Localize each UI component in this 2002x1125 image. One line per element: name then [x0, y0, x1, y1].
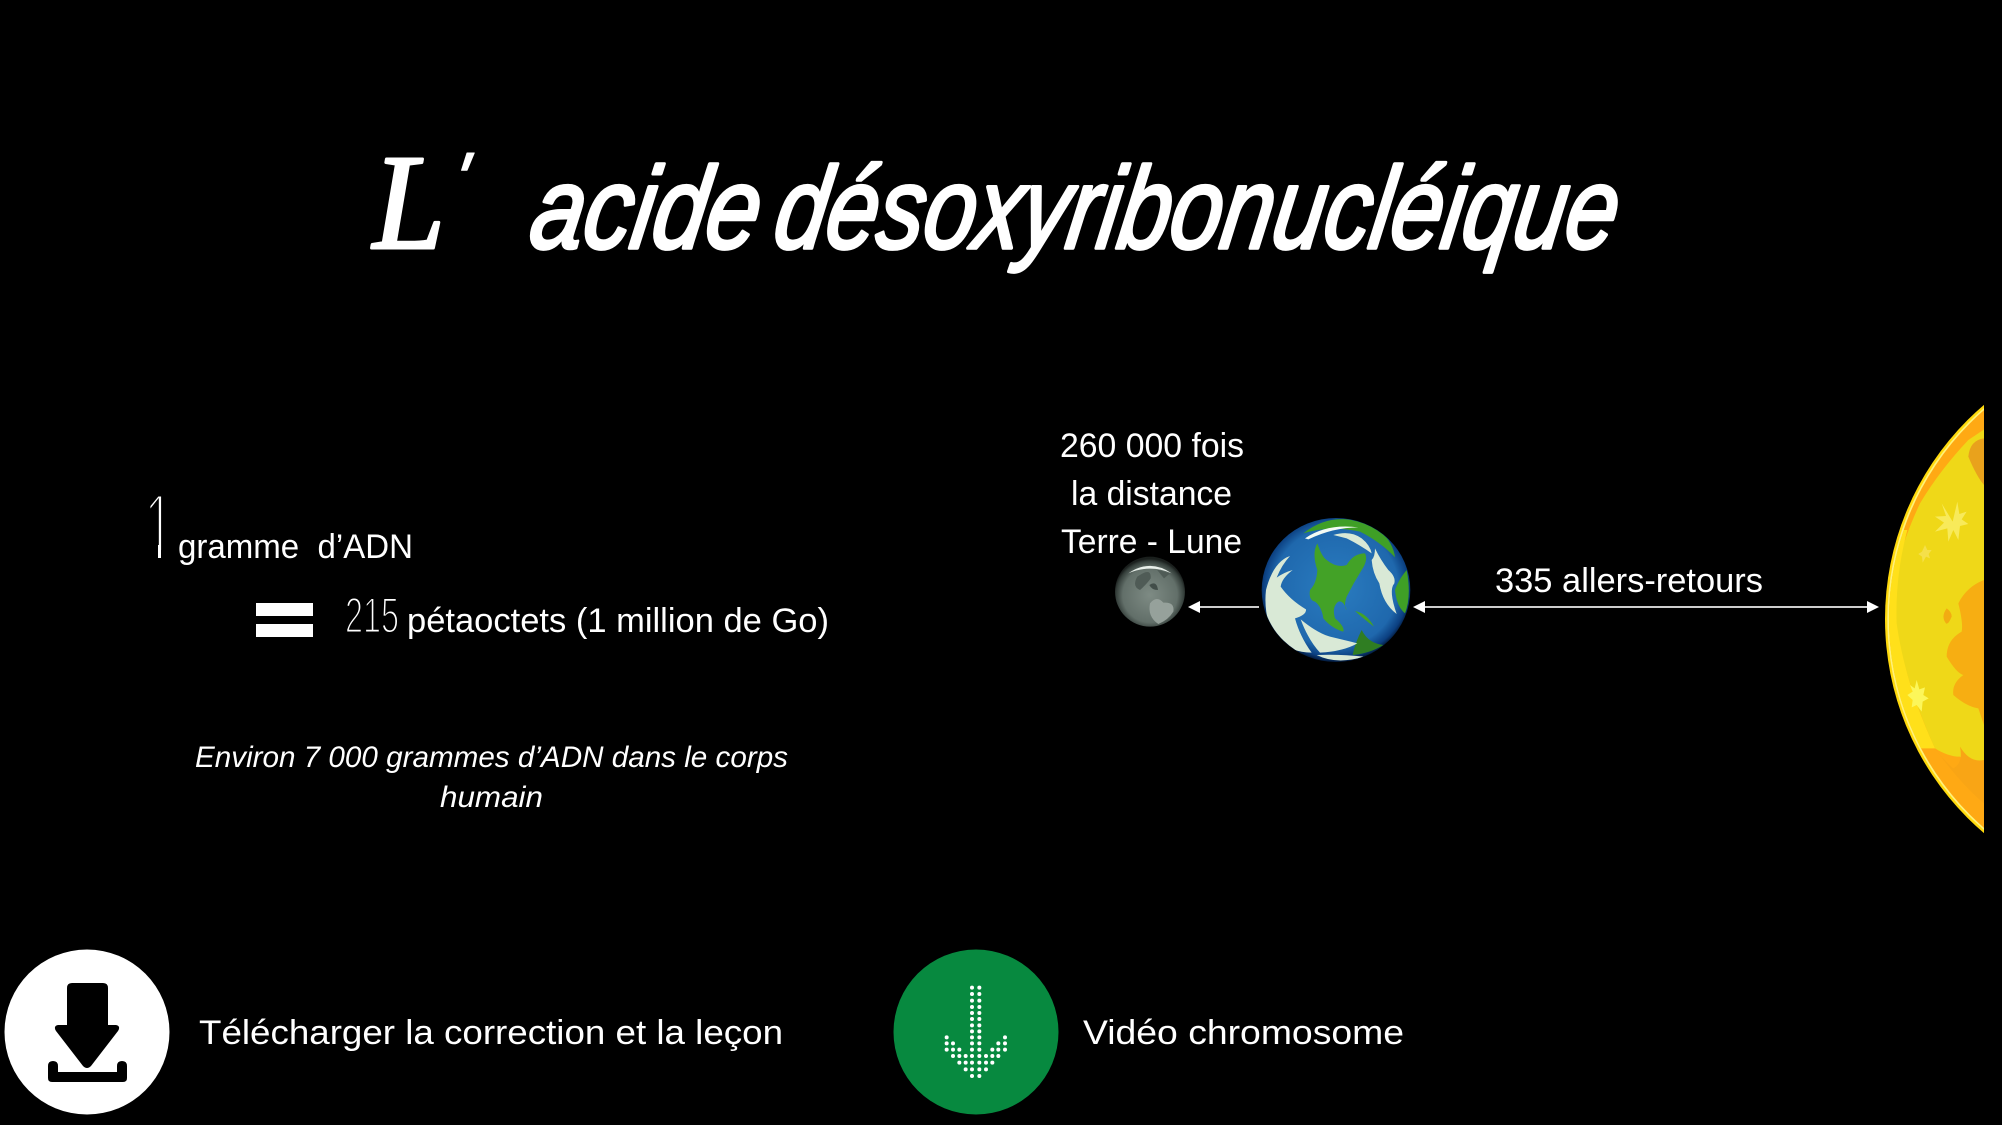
numeral 215: 215	[345, 588, 399, 644]
download button	[4, 950, 783, 1114]
italic note: humain	[440, 781, 543, 814]
icon: download	[4, 950, 170, 1114]
text: distance Earth-Moon: la distance	[1071, 475, 1232, 513]
sunspots	[1968, 438, 1984, 485]
label: download: Télécharger la correction et la leçon	[199, 1014, 783, 1052]
arrow: earth to moon	[1188, 601, 1259, 613]
text: distance Earth-Moon: 260 000 fois	[1060, 427, 1244, 465]
label: round trips: 335 allers-retours	[1495, 562, 1763, 600]
title	[371, 128, 1630, 278]
top green rim	[1303, 519, 1395, 557]
text block: 215 petabytes	[345, 588, 829, 644]
label: gramme d'ADN: gramme d’ADN	[178, 528, 413, 566]
icon: moon	[1115, 557, 1185, 627]
highlight	[1305, 526, 1358, 539]
label: video: Vidéo chromosome	[1083, 1014, 1404, 1052]
icon: earth	[1262, 518, 1410, 662]
italic note	[195, 741, 788, 814]
clouds	[1265, 556, 1312, 653]
large numeral 1	[150, 496, 162, 558]
continent	[1310, 543, 1366, 632]
equals sign	[256, 603, 313, 637]
icon: dotted arrow	[894, 950, 1058, 1114]
text block: one gram of DNA	[150, 496, 410, 565]
label: petabytes: pétaoctets (1 million de Go)	[407, 602, 829, 640]
title: acide	[523, 143, 772, 273]
text: distance Earth-Moon	[1060, 427, 1244, 561]
title: '	[444, 137, 477, 226]
video button	[894, 950, 1404, 1114]
stars	[1935, 502, 1968, 542]
text: distance Earth-Moon: Terre - Lune	[1061, 523, 1242, 561]
italic note: Environ 7 000 grammes d’ADN dans le corps	[195, 741, 788, 774]
large numeral 1: 1	[144, 474, 174, 581]
title: L	[371, 128, 445, 278]
arrow: earth to sun	[1413, 601, 1879, 613]
title: désoxyribonucléique	[767, 143, 1630, 273]
icon: sun	[1885, 404, 1984, 834]
